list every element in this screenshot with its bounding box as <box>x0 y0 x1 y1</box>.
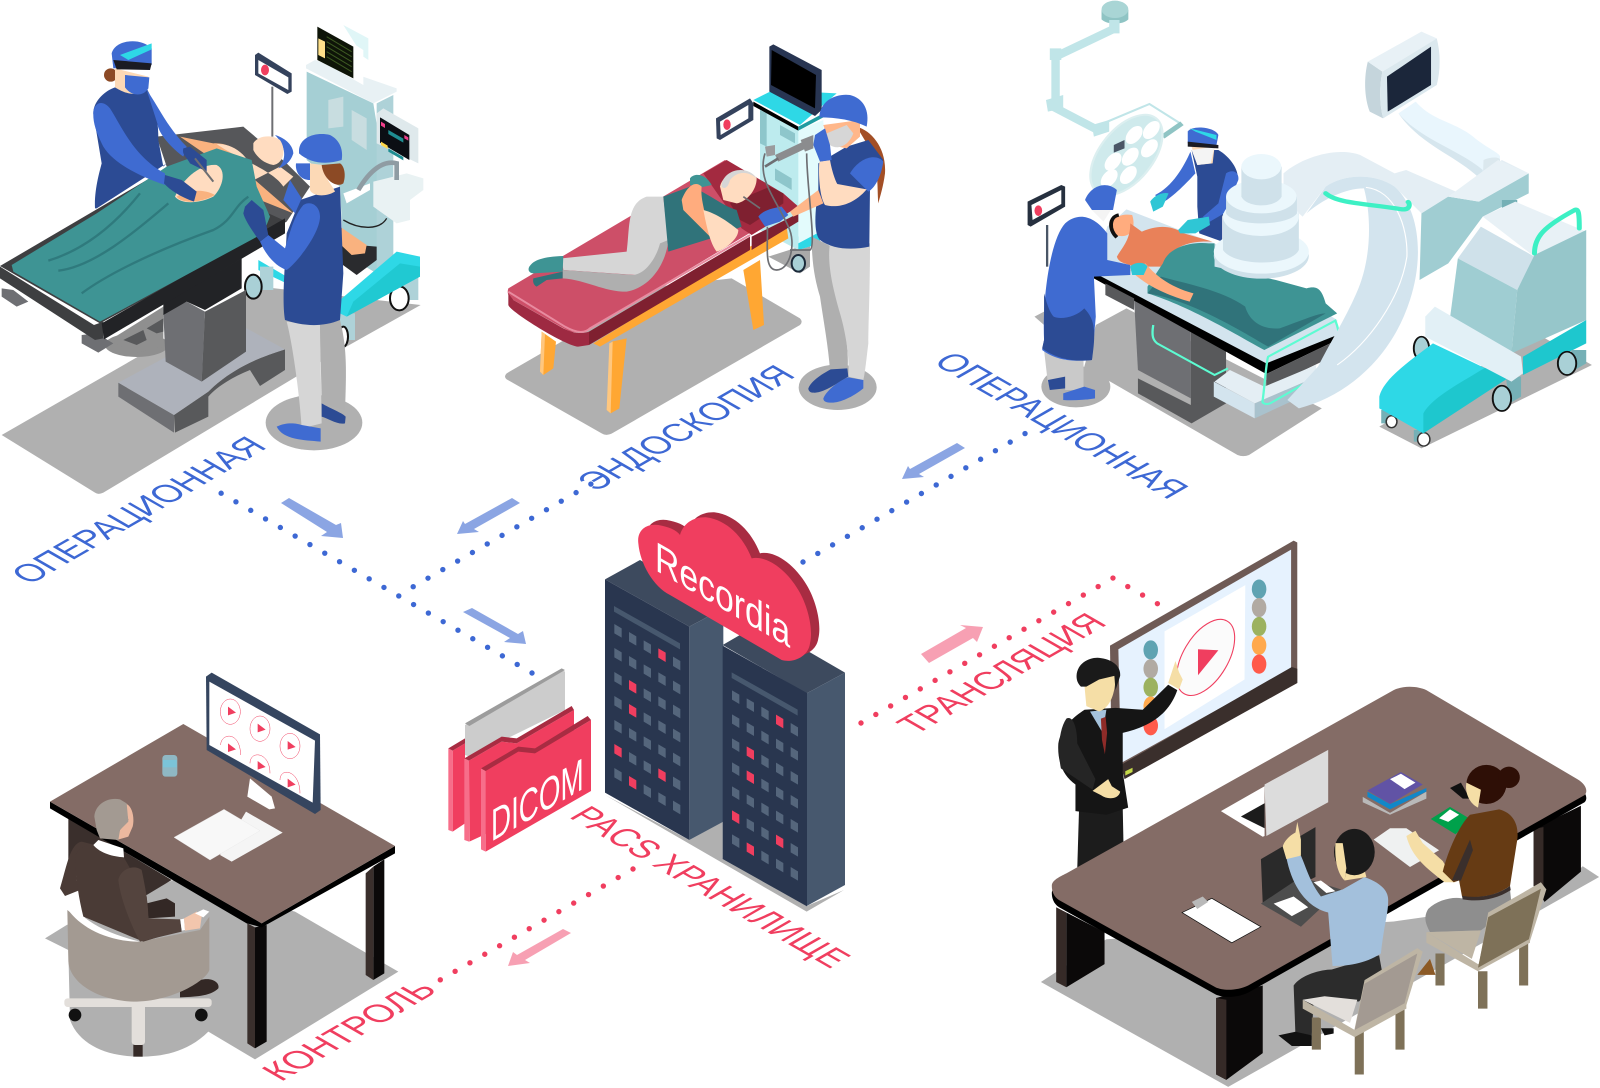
wall labels on cloud and folder <box>491 532 791 852</box>
meeting table <box>1052 687 1586 1080</box>
scene: endoscopy room <box>505 44 885 435</box>
floor shadow <box>1034 308 1592 456</box>
operating table with patient <box>0 127 310 340</box>
desk <box>50 724 395 1048</box>
armrest and hand <box>338 227 377 275</box>
surgeon at front <box>1042 185 1148 400</box>
endoscope <box>743 135 813 270</box>
label: endoscopy: ЭНДОСКОПИЯ <box>567 359 804 496</box>
X-ray emitter <box>1214 154 1309 279</box>
monitor <box>206 673 321 814</box>
patient under sheet <box>1111 215 1337 350</box>
anesthesia machine <box>245 20 423 347</box>
floor shadow <box>2 287 421 494</box>
surgeon at back <box>1150 128 1238 242</box>
patient <box>529 170 757 292</box>
endoscopist <box>758 95 885 403</box>
C-arm back <box>1284 152 1529 217</box>
Recordia label: Recordia <box>655 532 791 657</box>
C-arm front <box>1287 177 1418 408</box>
table items <box>1182 750 1472 943</box>
line from right operating room <box>803 433 1026 562</box>
surgical lamp <box>1046 1 1182 206</box>
arrow to broadcast <box>921 625 983 663</box>
woman in brown sweater <box>1406 765 1520 975</box>
arrow from right room <box>902 443 965 479</box>
label: broadcast: ТРАНСЛЯЦИЯ <box>887 607 1115 739</box>
display screen <box>1110 541 1297 779</box>
DICOM folders <box>448 668 591 852</box>
line to broadcast <box>861 578 1158 723</box>
base unit <box>1379 160 1586 446</box>
cloud <box>638 512 819 661</box>
tablet <box>716 98 753 140</box>
arrow to control <box>508 929 571 966</box>
right server tower <box>723 623 845 906</box>
left server tower <box>605 560 723 840</box>
surgeon one <box>93 41 213 208</box>
floor shadow <box>1041 866 1599 1087</box>
chair two <box>1426 882 1546 1009</box>
PACS servers <box>448 512 845 912</box>
seated man <box>60 799 209 942</box>
floor labels <box>1 346 1198 1086</box>
label: left operating room: ОПЕРАЦИОННАЯ <box>1 431 275 589</box>
DICOM label: DICOM <box>491 747 584 852</box>
table base <box>2 258 285 433</box>
chair one <box>1303 948 1423 1074</box>
man in blue shirt <box>1278 822 1388 1046</box>
green rails <box>1153 321 1340 404</box>
flow arrows <box>281 443 983 966</box>
operating table <box>1094 209 1339 423</box>
label: right operating room: ОПЕРАЦИОННАЯ <box>925 346 1198 504</box>
presenter <box>1058 658 1183 868</box>
surgeon two <box>243 134 346 442</box>
arrow to PACS <box>463 608 526 644</box>
office chair <box>64 892 219 1057</box>
endoscopy tower <box>753 44 837 273</box>
scene: meeting room <box>1041 541 1599 1087</box>
scene: operating room left <box>0 20 423 494</box>
scene: hybrid operating room with C-arm <box>1028 1 1592 456</box>
label: PACS storage: PACS ХРАНИЛИЩЕ <box>561 800 860 973</box>
arrow to PACS from left room <box>281 498 343 538</box>
bench <box>508 160 798 413</box>
tablet on stand <box>1028 185 1065 267</box>
label: control: КОНТРОЛЬ <box>252 974 446 1086</box>
floor shadow <box>505 278 877 435</box>
scene: control desk <box>45 673 398 1059</box>
floor shadow <box>45 880 398 1059</box>
line to control <box>440 869 633 980</box>
server shadow <box>605 795 844 912</box>
patient monitor tablet <box>255 53 292 137</box>
line from left operating room <box>219 492 532 673</box>
monitor and arm <box>1365 32 1500 186</box>
arrow from endoscopy <box>457 498 520 534</box>
desk items <box>162 755 283 862</box>
dotted connection lines <box>219 433 1158 980</box>
line from endoscopy <box>413 484 591 587</box>
